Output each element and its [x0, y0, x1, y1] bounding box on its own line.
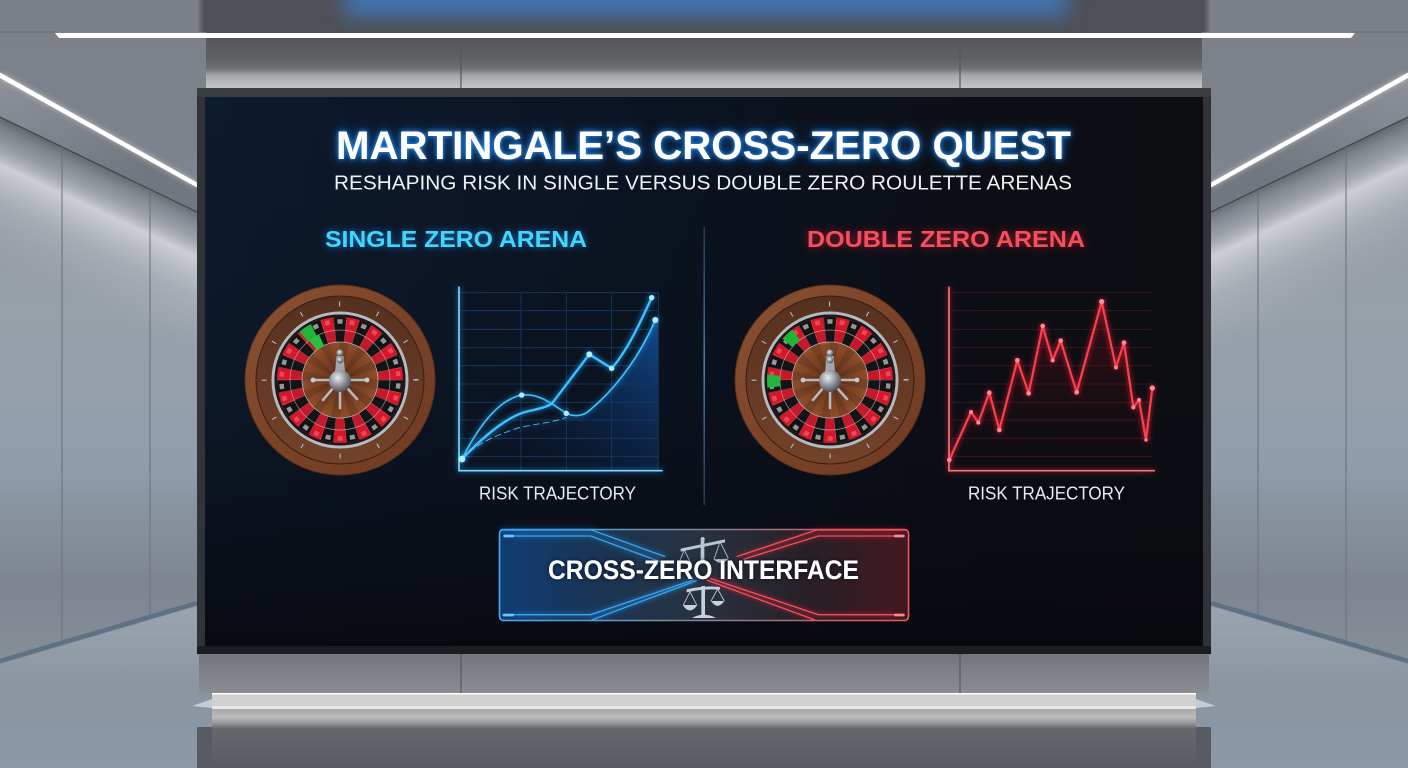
ceiling light strip: [55, 33, 1355, 38]
icon: lower balance scale: [683, 586, 724, 618]
floor glow beneath the screen: [192, 693, 1216, 768]
ceiling band: [0, 0, 1408, 34]
heading: single zero arena: SINGLE ZERO ARENA: [325, 226, 587, 252]
chart label: double zero: RISK TRAJECTORY: [968, 484, 1125, 504]
back wall strip above screen: [206, 37, 1203, 89]
roulette wheel: double zero: [735, 285, 925, 475]
center divider: [704, 227, 705, 505]
roulette wheel: single zero: [245, 285, 435, 475]
circuit traces: [500, 530, 907, 620]
screen frame: [197, 88, 1211, 654]
line chart: double zero risk trajectory: [947, 287, 1155, 471]
cross-zero interface panel: [500, 530, 908, 620]
plinth below the screen: [199, 654, 1209, 709]
line chart: single zero risk trajectory: [459, 287, 663, 471]
icon: upper balance scale: [679, 537, 729, 563]
title: MARTINGALE’S CROSS-ZERO QUEST: [336, 124, 1071, 168]
floor reflection under the screen: [197, 727, 1211, 768]
subtitle: RESHAPING RISK IN SINGLE VERSUS DOUBLE ZERO ROULETTE ARENAS: [334, 172, 1072, 194]
screen panel: [205, 97, 1203, 646]
heading: double zero arena: DOUBLE ZERO ARENA: [807, 226, 1085, 252]
right side wall and floor: [1196, 32, 1408, 768]
chart label: single zero: RISK TRAJECTORY: [479, 484, 636, 504]
left side wall and floor: [0, 32, 212, 768]
panel label: CROSS-ZERO INTERFACE: [548, 555, 859, 585]
